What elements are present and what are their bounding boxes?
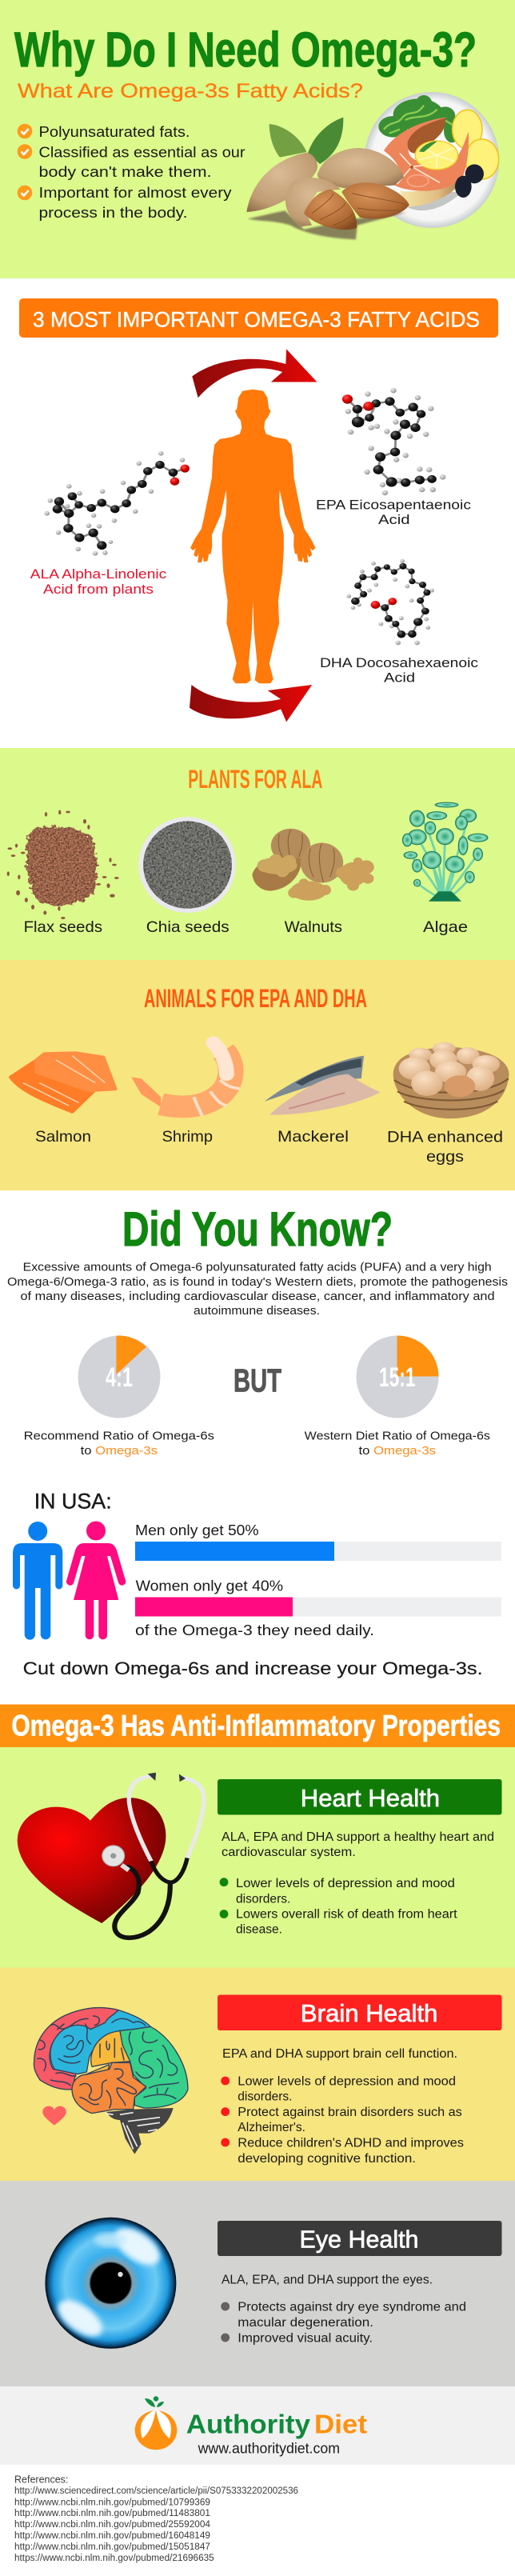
bullet: dry eye bbox=[221, 2301, 466, 2330]
label: DHA bbox=[320, 655, 479, 685]
heading bar bbox=[19, 298, 498, 338]
label: chia seeds: Chia seeds bbox=[146, 918, 230, 936]
molecule: EPA bbox=[342, 388, 445, 495]
bullet text: polyunsaturated: Polyunsaturated fats. bbox=[38, 123, 190, 140]
icon: check bullet bbox=[18, 144, 32, 159]
bullet: depression: Lower levels of depression and mood bbox=[238, 2074, 456, 2088]
heading bar: eye health bbox=[218, 2221, 502, 2256]
bullet: risk of death: Lowers overall risk of death from heart bbox=[236, 1907, 457, 1922]
text: heart intro: cardiovascular system. bbox=[222, 1846, 356, 1859]
human body silhouette bbox=[191, 390, 314, 683]
bullet text: essential: Classified as essential as our bbox=[38, 143, 245, 160]
text: BUT: BUT bbox=[234, 1362, 281, 1399]
references: https://www.ncbi.nlm.nih.gov/pubmed/21696635 bbox=[14, 2554, 214, 2563]
bar: women: Women only get 40% bbox=[136, 1578, 283, 1594]
label: mackerel: Mackerel bbox=[277, 1128, 349, 1146]
label: EPA: Acid bbox=[378, 512, 409, 527]
subtitle: What Are Omega-3s Fatty Acids? bbox=[18, 80, 363, 102]
references: http://www.ncbi.nlm.nih.gov/pubmed/11483801 bbox=[14, 2509, 210, 2518]
paragraph: Excessive amounts of Omega-6 polyunsaturated fatty acids (PUFA) and a very high bbox=[23, 1261, 492, 1274]
bullet: depression: disorders. bbox=[236, 1892, 290, 1906]
label: ALA: ALA Alpha-Linolenic bbox=[30, 566, 167, 582]
caption: western diet ratio bbox=[305, 1429, 490, 1458]
label: ALA bbox=[30, 566, 167, 597]
heading bar: brain health bbox=[218, 1995, 502, 2030]
illustration: almonds and salmon plate bbox=[246, 92, 499, 239]
label: DHA enhanced eggs: eggs bbox=[426, 1148, 464, 1166]
text: cut down: Cut down Omega-6s and increase your Omega-3s. bbox=[23, 1658, 483, 1678]
arrow: bottom bbox=[190, 685, 312, 722]
paragraph: of many diseases, including cardiovascular disease, cancer, and inflammatory and bbox=[21, 1290, 494, 1303]
references: http://www.ncbi.nlm.nih.gov/pubmed/10799369 bbox=[14, 2498, 210, 2507]
bullet text: important bbox=[38, 184, 232, 221]
label: ALA: Acid from plants bbox=[43, 582, 154, 597]
label: DHA enhanced eggs: DHA enhanced bbox=[387, 1128, 503, 1146]
icon: chia seeds bowl bbox=[138, 817, 236, 913]
bullet: visual acuity: Improved visual acuity. bbox=[238, 2331, 373, 2346]
bullet text: essential: body can't make them. bbox=[38, 163, 211, 180]
paragraph: autoimmune diseases. bbox=[194, 1305, 320, 1318]
panel: plants for ALA bbox=[0, 748, 515, 960]
panel: animals for EPA and DHA bbox=[0, 960, 515, 1190]
heading bar: 3 MOST IMPORTANT OMEGA-3 FATTY ACIDS bbox=[33, 308, 480, 332]
heading bar: eye health: Eye Health bbox=[299, 2225, 419, 2253]
text: heart intro: ALA, EPA and DHA support a healthy heart and bbox=[222, 1830, 494, 1844]
label: EPA: EPA Eicosapentaenoic bbox=[316, 497, 472, 512]
heading: PLANTS FOR ALA bbox=[188, 765, 322, 794]
heading: ANIMALS FOR EPA AND DHA bbox=[144, 984, 367, 1013]
pie chart: 15:1 bbox=[357, 1335, 438, 1418]
text: brain intro: EPA and DHA support brain cell function. bbox=[222, 2047, 457, 2061]
logo wordmark bbox=[186, 2409, 367, 2438]
molecule: ALA bbox=[44, 451, 190, 556]
molecule: DHA bbox=[346, 559, 434, 645]
label: algae: Algae bbox=[423, 918, 468, 936]
bullet: depression bbox=[221, 2074, 456, 2104]
panel: most important fatty acids bbox=[19, 298, 498, 722]
references: http://www.ncbi.nlm.nih.gov/pubmed/15051847 bbox=[14, 2542, 210, 2552]
paragraph bbox=[7, 1261, 508, 1318]
arrow: top bbox=[192, 349, 317, 398]
caption: western diet ratio: to Omega-3s bbox=[358, 1444, 436, 1458]
icon: eye bbox=[45, 2218, 176, 2349]
text: heart intro bbox=[222, 1830, 494, 1859]
logo url: www.authoritydiet.com bbox=[198, 2441, 340, 2457]
panel: intro bbox=[0, 0, 515, 278]
bar: men bbox=[135, 1522, 501, 1561]
references: http://www.sciencedirect.com/science/article/pii/S0753332202002536 bbox=[14, 2486, 298, 2496]
bullet: depression bbox=[220, 1877, 455, 1906]
caption: recommended ratio: Recommend Ratio of Omega-6s bbox=[24, 1429, 214, 1442]
label: EPA bbox=[316, 497, 472, 527]
label: walnuts: Walnuts bbox=[285, 918, 342, 936]
icon: algae bbox=[403, 802, 488, 902]
icon: flax seeds bbox=[7, 810, 119, 919]
icon: mackerel bbox=[265, 1056, 381, 1115]
label: DHA: DHA Docosahexaenoic bbox=[320, 655, 479, 670]
heading bar: brain health: Brain Health bbox=[301, 1999, 437, 2027]
label: DHA enhanced eggs bbox=[387, 1128, 503, 1166]
bullet: risk of death: disease. bbox=[236, 1923, 282, 1937]
paragraph: Omega-6/Omega-3 ratio, as is found in today's Western diets, promote the pathogenesis bbox=[7, 1276, 508, 1289]
icon: shrimp bbox=[131, 1043, 240, 1116]
icon: woman bbox=[66, 1522, 126, 1639]
bullet: ADHD: Reduce children's ADHD and improves bbox=[238, 2137, 464, 2150]
bullet: ADHD: developing cognitive function. bbox=[238, 2152, 416, 2166]
bullet: dry eye: Protects against dry eye syndrome and bbox=[238, 2301, 466, 2314]
references: References: bbox=[14, 2474, 68, 2486]
bullet text: important: process in the body. bbox=[38, 204, 187, 221]
bullet: dry eye: macular degeneration. bbox=[238, 2316, 373, 2330]
icon: brain bbox=[34, 2008, 188, 2154]
heading bar: heart health bbox=[218, 1779, 502, 1814]
pie chart: 15:1: 15:1 bbox=[379, 1362, 416, 1393]
caption: recommended ratio bbox=[24, 1429, 214, 1458]
pie chart: 4:1 bbox=[78, 1336, 160, 1418]
bullet: depression: Lower levels of depression and mood bbox=[236, 1877, 455, 1890]
bullet: alzheimer's: Alzheimer's. bbox=[238, 2121, 305, 2134]
label: DHA: Acid bbox=[384, 670, 415, 685]
panel: heart health bbox=[0, 1747, 515, 1968]
caption: western diet ratio: Western Diet Ratio of Omega-6s bbox=[305, 1429, 490, 1442]
references bbox=[14, 2474, 298, 2563]
bar: men: Men only get 50% bbox=[135, 1522, 259, 1538]
bullet text: essential bbox=[38, 143, 245, 180]
label: salmon: Salmon bbox=[35, 1128, 91, 1146]
bullet: depression: disorders. bbox=[238, 2090, 293, 2104]
bullet text: important: Important for almost every bbox=[38, 184, 232, 201]
references: http://www.ncbi.nlm.nih.gov/pubmed/16048149 bbox=[14, 2531, 210, 2541]
pie chart: 4:1: 4:1 bbox=[106, 1362, 133, 1393]
references: http://www.ncbi.nlm.nih.gov/pubmed/25592004 bbox=[14, 2520, 211, 2530]
bar: women bbox=[135, 1578, 501, 1616]
icon: salmon bbox=[10, 1053, 116, 1112]
icon: check bullet bbox=[18, 186, 32, 200]
panel: logo footer bbox=[0, 2386, 515, 2465]
bullet: risk of death bbox=[220, 1907, 457, 1937]
heading bar: heart health: Heart Health bbox=[301, 1784, 440, 1812]
bullet: alzheimer's bbox=[221, 2106, 462, 2134]
icon: man bbox=[13, 1522, 62, 1640]
panel: eye health bbox=[0, 2181, 515, 2386]
heading: Did You Know? bbox=[122, 1202, 393, 1256]
icon: heart with stethoscope bbox=[18, 1773, 204, 1938]
icon: check bullet bbox=[18, 124, 32, 138]
icon: logo fruit bbox=[135, 2396, 177, 2450]
text: of the omega-3: of the Omega-3 they need daily. bbox=[135, 1622, 374, 1638]
bullet: alzheimer's: Protect against brain disorders such as bbox=[238, 2106, 462, 2119]
bullet: ADHD bbox=[221, 2137, 464, 2166]
caption: recommended ratio: to Omega-3s bbox=[81, 1444, 158, 1458]
label: flax seeds: Flax seeds bbox=[24, 918, 102, 936]
logo wordmark: Diet bbox=[314, 2409, 367, 2438]
panel: did you know bbox=[7, 1202, 508, 1678]
icon: walnuts bbox=[252, 829, 374, 901]
heading: in USA: IN USA: bbox=[34, 1490, 112, 1514]
logo wordmark: Authority bbox=[186, 2409, 311, 2438]
icon: eggs in basket bbox=[393, 1042, 509, 1118]
label: shrimp: Shrimp bbox=[162, 1128, 213, 1146]
text: eye intro: ALA, EPA, and DHA support the eyes. bbox=[222, 2274, 433, 2287]
panel: brain health bbox=[0, 1968, 515, 2181]
